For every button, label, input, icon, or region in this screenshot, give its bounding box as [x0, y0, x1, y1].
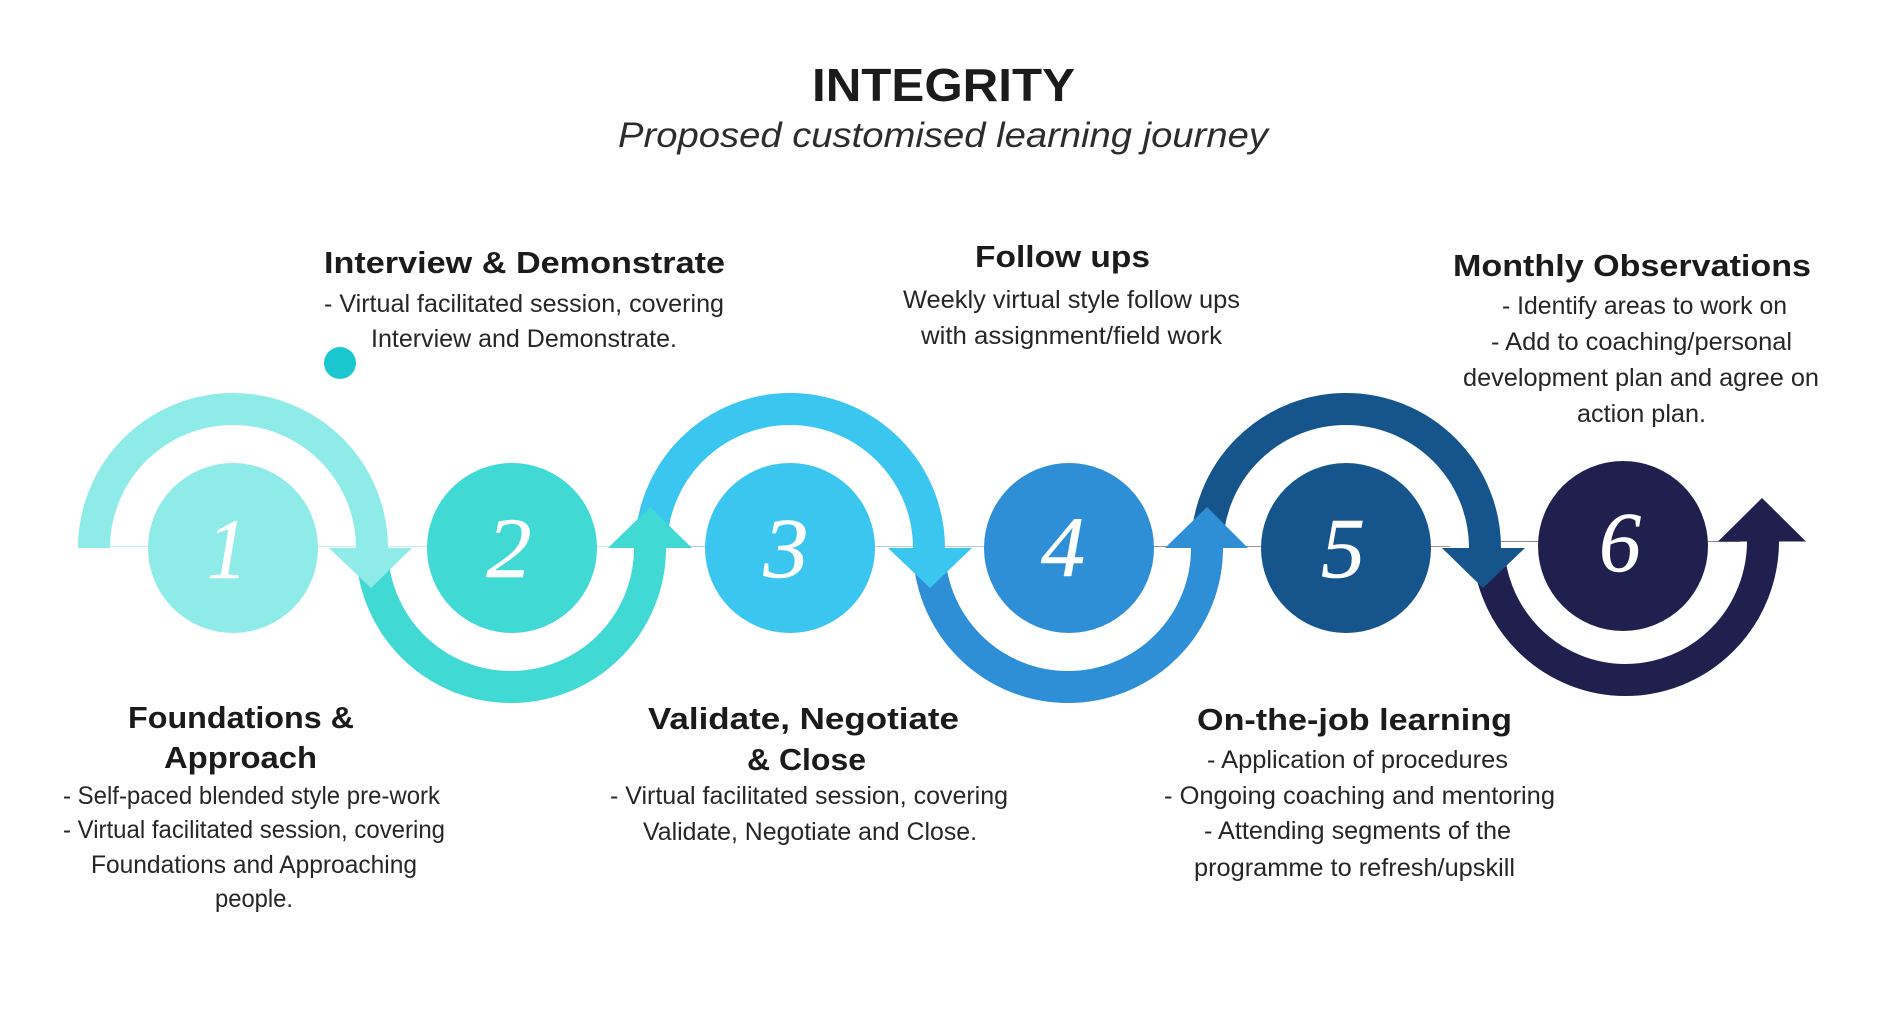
text block: Monthly Observations: - Add to coaching/personal	[1491, 328, 1792, 356]
text block: Interview & Demonstrate	[324, 245, 725, 353]
text block: On-the-job learning: - Attending segments of the	[1204, 817, 1511, 845]
text block: Foundations & Approach: Approach	[164, 740, 317, 775]
text block: Monthly Observations: action plan.	[1577, 400, 1706, 428]
step 2 circle: 2	[486, 500, 532, 596]
flow diagram: arcs	[94, 409, 1763, 687]
arc 1	[94, 409, 372, 548]
text block: Monthly Observations: - Identify areas to work on	[1502, 292, 1787, 320]
step 6 circle	[1538, 461, 1708, 631]
subtitle: Proposed customised learning journey	[618, 116, 1271, 155]
text block: Foundations & Approach: - Virtual facilitated session, covering	[63, 816, 445, 844]
text block: On-the-job learning: programme to refresh/upskill	[1194, 854, 1515, 882]
text block: Validate, Negotiate & Close: & Close	[747, 742, 866, 777]
text block: Follow ups: Follow ups	[975, 239, 1150, 274]
text block: On-the-job learning	[1164, 702, 1555, 882]
text block: Follow ups	[903, 239, 1240, 350]
text block: On-the-job learning: - Ongoing coaching and mentoring	[1164, 782, 1555, 810]
step 1 circle: 1	[207, 501, 247, 597]
text block: Foundations & Approach: people.	[215, 885, 293, 913]
arc 2	[372, 548, 650, 687]
text block: Validate, Negotiate & Close: Validate, Negotiate and Close.	[643, 818, 977, 846]
arrow head 4	[1165, 507, 1248, 548]
text block: Validate, Negotiate & Close	[610, 701, 1008, 846]
arc 5	[1207, 409, 1485, 548]
decorative teal dot	[324, 347, 356, 379]
step 1 circle	[148, 463, 318, 633]
text block: Follow ups: Weekly virtual style follow ups	[903, 286, 1240, 314]
text block: On-the-job learning: - Application of procedures	[1207, 746, 1508, 774]
text block: Follow ups: with assignment/field work	[920, 322, 1223, 350]
arrow head 5	[1442, 548, 1525, 588]
text block: Foundations & Approach: Foundations and Approaching	[91, 851, 417, 879]
text block: Interview & Demonstrate: Interview & Demonstrate	[324, 245, 725, 280]
text block: Interview & Demonstrate: Interview and Demonstrate.	[371, 325, 677, 353]
text block: Validate, Negotiate & Close: Validate, Negotiate	[648, 701, 959, 736]
step 3 circle: 3	[762, 500, 808, 596]
text block: Foundations & Approach	[63, 700, 445, 913]
step 6 circle: 6	[1599, 494, 1641, 590]
arc 4	[929, 548, 1207, 687]
arrow head 1	[329, 548, 412, 588]
step 5 circle: 5	[1321, 500, 1365, 596]
arrow head 2	[608, 507, 692, 548]
step 4 circle: 4	[1041, 499, 1085, 595]
arc 3	[651, 409, 929, 548]
step 3 circle	[705, 463, 875, 633]
step 2 circle	[427, 463, 597, 633]
arrow head 6	[1718, 498, 1806, 542]
text block: Validate, Negotiate & Close: - Virtual facilitated session, covering	[610, 782, 1008, 810]
step 5 circle	[1261, 463, 1431, 633]
text block: Monthly Observations: development plan and agree on	[1463, 364, 1819, 392]
arrow head 3	[888, 548, 972, 588]
title: INTEGRITY	[812, 59, 1075, 111]
text block: Monthly Observations: Monthly Observations	[1453, 248, 1811, 283]
text block: Foundations & Approach: - Self-paced blended style pre-work	[63, 782, 440, 810]
text block: Interview & Demonstrate: - Virtual facilitated session, covering	[324, 290, 724, 318]
arc 6	[1488, 541, 1763, 680]
step 4 circle	[984, 463, 1154, 633]
text block: Foundations & Approach: Foundations &	[128, 700, 354, 735]
text block: On-the-job learning: On-the-job learning	[1197, 702, 1512, 737]
text block: Monthly Observations	[1453, 248, 1819, 428]
